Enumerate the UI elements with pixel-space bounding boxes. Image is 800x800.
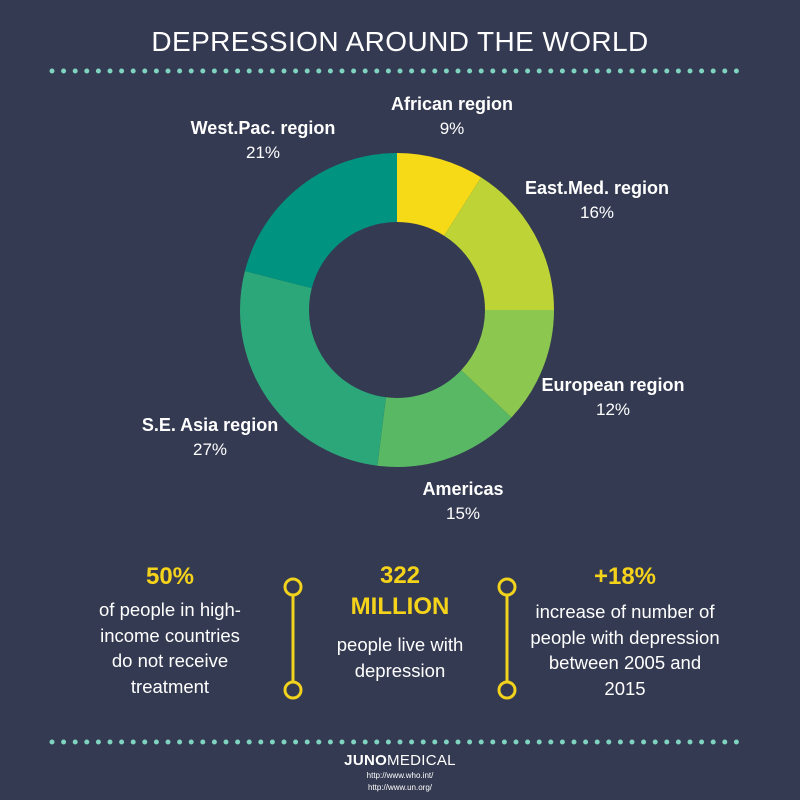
label east med [525,178,669,222]
label west pac [190,118,335,162]
stat middle [337,562,463,681]
stat left: of people in high-income countries do not receive treatment [99,599,241,696]
stat middle: 322 [380,562,420,589]
label african: 9% [440,119,464,138]
label african: African region [391,94,513,114]
label se asia: 27% [193,440,227,459]
stat middle: people live with depression [337,634,463,680]
connector left [285,579,301,698]
footer sources [367,771,434,792]
label americas: 15% [446,504,480,523]
stat right: +18% [594,563,656,590]
footer sources: http://www.un.org/ [368,783,432,792]
footer logo: JUNOMEDICAL [344,752,456,769]
label african [391,94,513,138]
footer sources: http://www.who.int/ [367,771,433,780]
label european: European region [541,375,684,395]
label european: 12% [596,400,630,419]
label americas [422,479,504,523]
label east med: East.Med. region [525,178,669,198]
stat middle: MILLION [351,593,449,620]
title: DEPRESSION AROUND THE WORLD [151,26,649,57]
donut chart [274,188,520,432]
label east med: 16% [580,203,614,222]
stat right: increase of number of people with depression between 2005 and 2015 [530,601,720,698]
label se asia [142,415,278,459]
label se asia: S.E. Asia region [142,415,278,435]
connector right [499,579,515,698]
label west pac: West.Pac. region [191,118,335,138]
label west pac: 21% [246,143,280,162]
label european [541,375,684,419]
stat left: 50% [146,563,194,590]
label americas: Americas [422,479,504,499]
